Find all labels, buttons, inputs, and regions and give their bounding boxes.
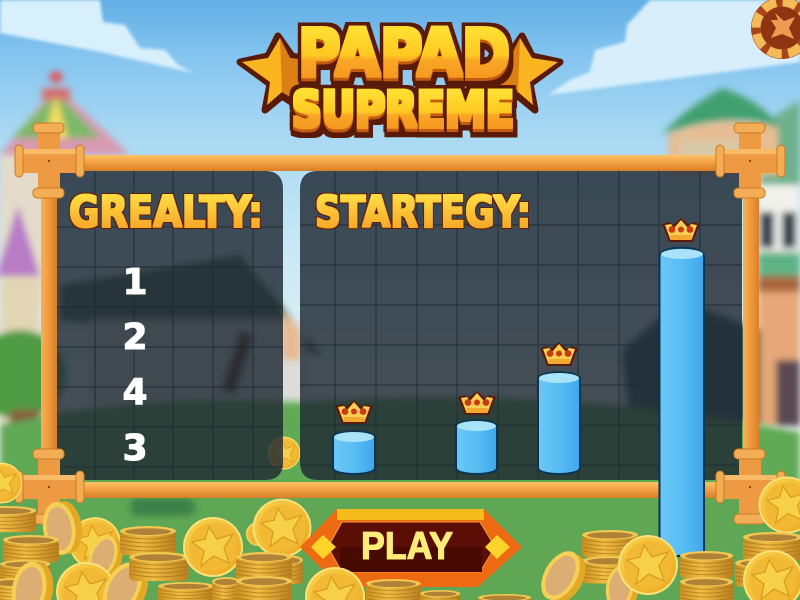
icon: right diamond — [485, 535, 510, 559]
button label: PLAY — [361, 525, 453, 568]
cloud: top right — [548, 0, 800, 95]
bar 2 with crown — [456, 391, 497, 474]
cloud: top left — [0, 0, 194, 73]
icon: left diamond — [311, 535, 336, 559]
ground — [0, 397, 800, 600]
bar 4 with crown — [660, 218, 704, 556]
bar 3 with crown — [538, 342, 580, 474]
number list: 1 — [122, 262, 148, 303]
heading: greatly: GREALTY: — [69, 187, 263, 238]
coin pile: left — [0, 463, 311, 600]
frame shadow — [130, 498, 195, 516]
number list: 4 — [122, 372, 148, 413]
blurred buildings — [0, 72, 800, 475]
number list — [122, 262, 148, 469]
coin pile: center — [305, 567, 531, 600]
title logo — [240, 15, 560, 139]
heading: strategy: STARTEGY: — [315, 187, 531, 238]
title text: PAPAD — [298, 15, 510, 92]
icon: corner medallion — [751, 0, 800, 59]
number list: 2 — [122, 317, 148, 358]
title text: SUPREME — [292, 81, 514, 139]
play button — [300, 509, 522, 587]
coin pile: right — [533, 476, 800, 600]
icon: right star — [478, 36, 560, 112]
wooden frame — [15, 123, 785, 524]
bar 1 with crown — [333, 400, 375, 474]
number list: 3 — [122, 428, 148, 469]
panel: greatly — [57, 171, 283, 480]
small coin behind panels — [268, 436, 300, 470]
title text — [292, 15, 514, 139]
icon: left star — [240, 36, 322, 112]
panel: strategy — [300, 171, 742, 480]
